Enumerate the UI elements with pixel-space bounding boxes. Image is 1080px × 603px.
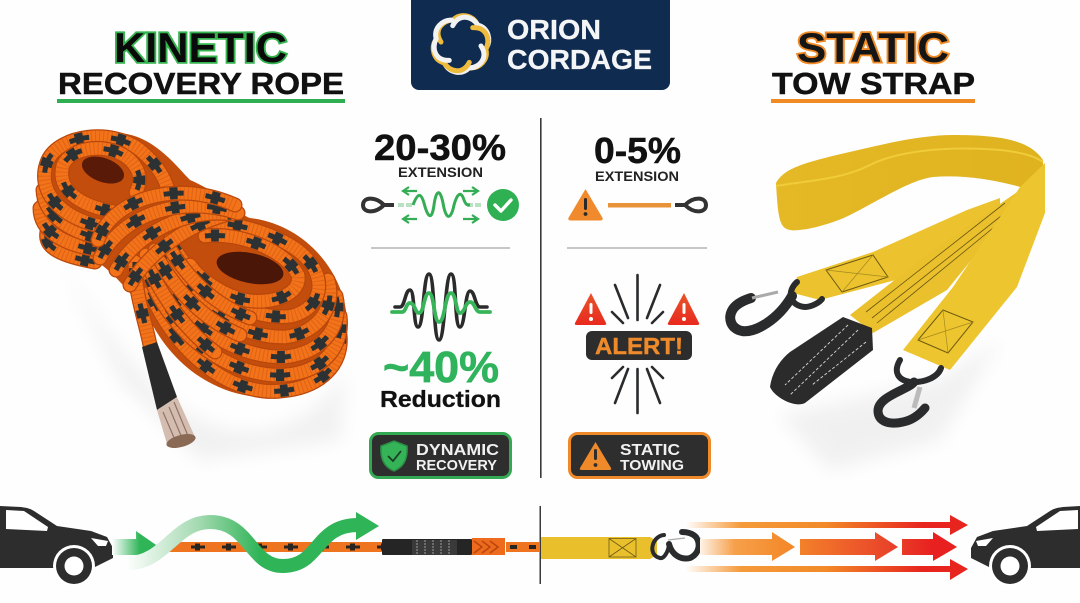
icon: car left: [0, 506, 113, 587]
right hook: [878, 360, 941, 423]
heading line: Tow Strap: TOW STRAP: [772, 66, 975, 101]
strap segment: [541, 537, 657, 559]
frayed rope end: [157, 397, 197, 451]
kinetic stats column: [363, 127, 519, 478]
left lobe coils: [40, 137, 168, 262]
rope splice sleeve: [382, 538, 505, 555]
black strap end: [770, 317, 873, 404]
arrow: top red: [685, 515, 968, 535]
middle strap with stitching: [850, 190, 1036, 333]
rope hole left: [78, 151, 128, 189]
title: kinetic recovery rope: [57, 24, 345, 103]
alert box: ALERT!: [595, 333, 683, 359]
icon: warning triangle left: [575, 293, 606, 325]
badge: dynamic recovery: [370, 434, 510, 478]
bottom scene: kinetic pull: [0, 506, 540, 587]
icon: rigid strap line: [608, 199, 706, 211]
stat: 0-5% extension: 0-5%: [594, 130, 681, 171]
icon: check circle: [487, 189, 519, 221]
left tail with stitched patch: [793, 198, 1000, 300]
title: static tow strap: [771, 24, 975, 103]
rope line: [160, 542, 540, 552]
badge: static towing: [570, 434, 710, 478]
badge: dynamic recovery: DYNAMIC: [416, 442, 499, 459]
illustration: yellow tow strap: [730, 135, 1045, 470]
arrow: green wave: [128, 512, 379, 566]
left hook: [730, 282, 822, 331]
rope hole right: [214, 246, 286, 290]
bottom divider: [540, 506, 541, 584]
label: extension: EXTENSION: [398, 164, 483, 180]
label: extension: EXTENSION: [595, 168, 679, 184]
icon: car right: [971, 506, 1080, 587]
icon: shield: [381, 441, 407, 471]
logo panel: Orion Cordage: [411, 0, 670, 90]
bottom scene: static pull: [541, 506, 1080, 587]
strap loop: [776, 135, 1044, 230]
arrow: segmented 3: [902, 532, 957, 561]
icon: alert rays bottom: [612, 367, 663, 413]
heading word: Static: STATIC: [797, 24, 949, 71]
logo text: ORION: [507, 14, 601, 45]
arrow: segmented 1: [700, 532, 795, 561]
right tail with stitched patch: [903, 163, 1045, 370]
orange underline: [771, 99, 975, 103]
icon: woven knot: [425, 10, 497, 78]
stat: 20-30% extension: 20-30%: [374, 127, 506, 168]
badge: static towing: TOWING: [620, 457, 684, 474]
icon: warning triangle right: [668, 293, 699, 325]
label: reduction: Reduction: [380, 386, 501, 412]
badge: dynamic recovery: RECOVERY: [416, 457, 497, 474]
icon: stretching rope: [363, 187, 482, 223]
rope end wrap: [142, 342, 177, 410]
arrow: segmented 2: [800, 532, 898, 561]
arrow: straight green: [112, 531, 159, 562]
icon: warning triangle: [569, 190, 602, 220]
green underline: [57, 99, 345, 103]
right lobe coils: [146, 222, 340, 391]
illustration: coiled kinetic rope: [37, 133, 347, 460]
heading word: Kinetic: KINETIC: [114, 24, 287, 71]
badge: static towing: STATIC: [620, 442, 680, 459]
centre vertical divider: [540, 118, 542, 478]
hook: [652, 532, 699, 558]
icon: alert rays top: [612, 275, 663, 323]
logo text: CORDAGE: [507, 44, 652, 75]
heading line: Recovery Rope: RECOVERY ROPE: [58, 66, 344, 101]
stat: 40% reduction: ~40%: [383, 343, 499, 392]
icon: warning triangle badge: [580, 442, 611, 470]
arrow: bottom red: [685, 559, 968, 580]
crossing strands: [98, 193, 250, 352]
chart: damped wave: [392, 274, 490, 340]
static stats column: [567, 130, 710, 478]
